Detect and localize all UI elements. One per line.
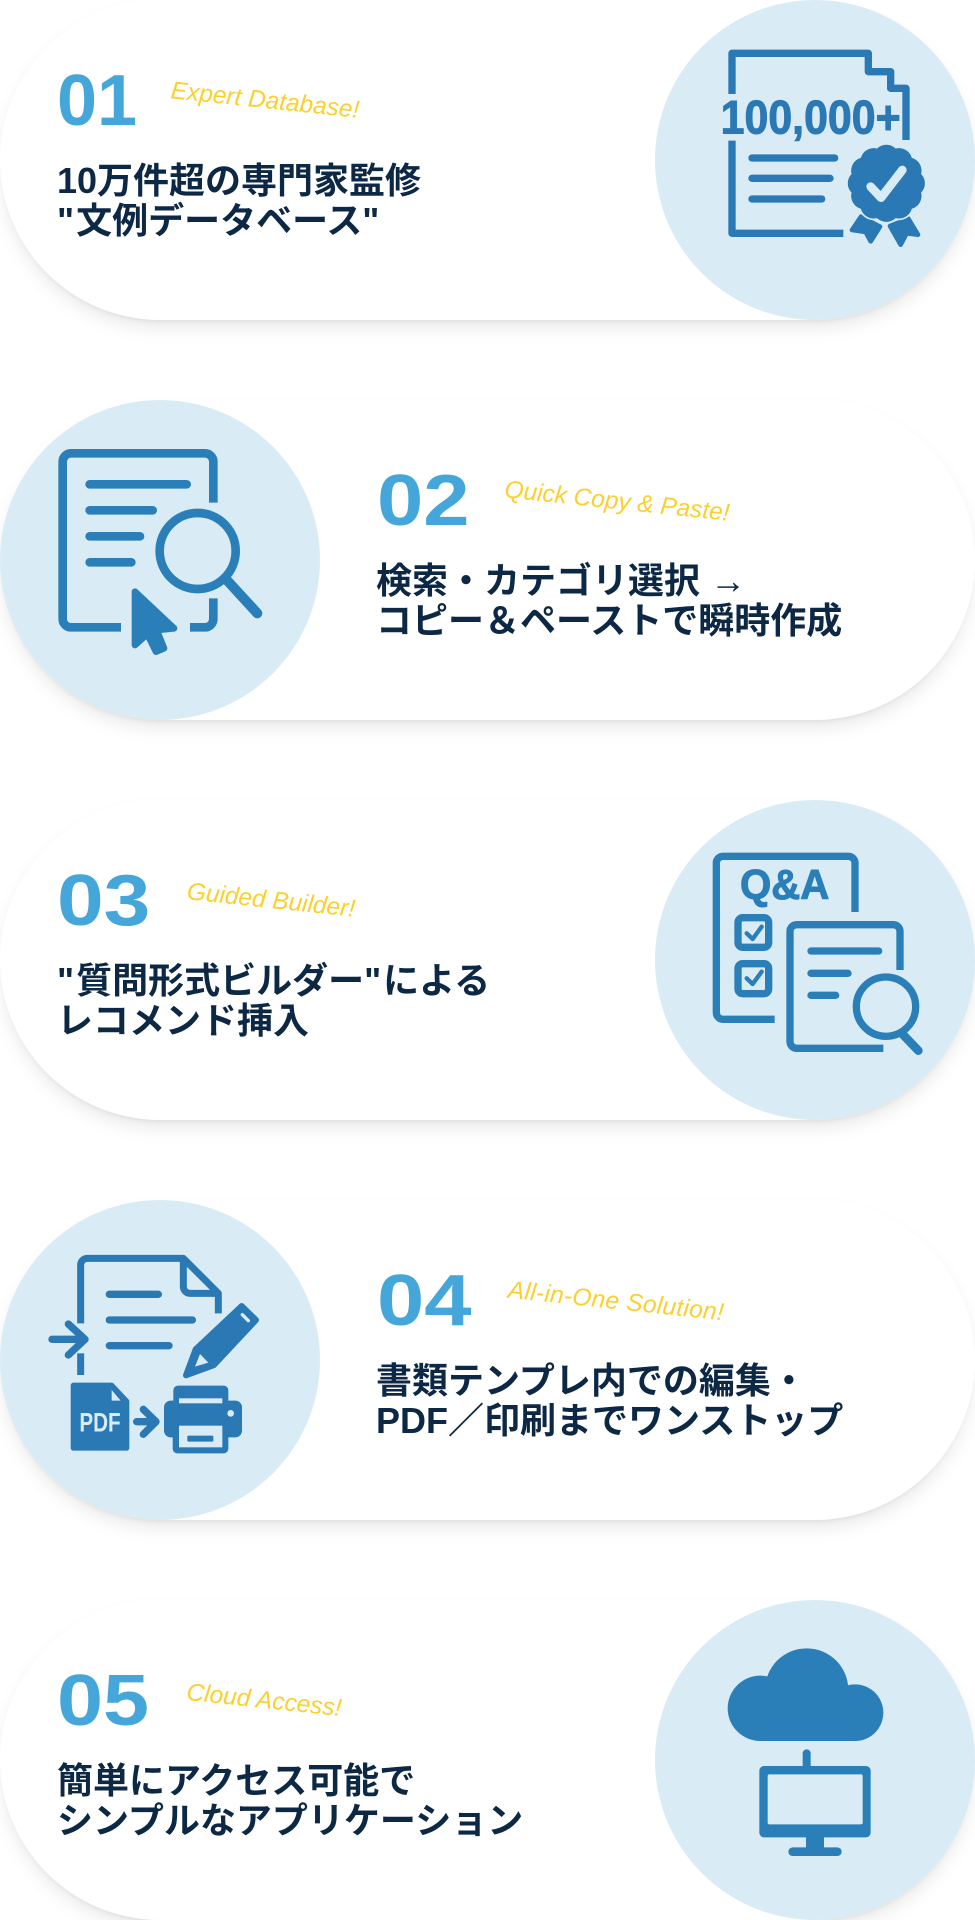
icon circle 04 bbox=[0, 1200, 320, 1520]
icon circle 02 bbox=[0, 400, 320, 720]
panel: feature 02 bbox=[0, 400, 975, 720]
number 03: 03 bbox=[57, 861, 150, 941]
icon: document, magnifier and cursor bbox=[58, 449, 262, 655]
tagline: Guided Builder: Guided Builder! bbox=[186, 878, 356, 923]
tagline: Expert Database: Expert Database! bbox=[170, 77, 361, 124]
icon: cloud and monitor bbox=[728, 1648, 884, 1856]
icon: Q&A checklist and document search: Q&A bbox=[740, 861, 829, 908]
heading 02: 検索・カテゴリ選択 → bbox=[376, 560, 746, 600]
number 04: 04 bbox=[377, 1261, 472, 1341]
heading 03: "質問形式ビルダー"による bbox=[57, 960, 490, 1000]
heading 05 bbox=[57, 1760, 523, 1840]
panel: feature 03 bbox=[0, 800, 975, 1120]
panel: feature 05 bbox=[0, 1600, 975, 1920]
heading 04: 書類テンプレ内での編集・ bbox=[376, 1360, 807, 1400]
heading 05: シンプルなアプリケーション bbox=[57, 1800, 523, 1840]
icon circle 01 bbox=[655, 0, 975, 320]
icon: document, pencil, PDF and printer bbox=[48, 1254, 259, 1454]
heading 02: コピー＆ペーストで瞬時作成 bbox=[376, 600, 842, 640]
panel: feature 04 bbox=[0, 1200, 975, 1520]
heading 04: PDF／印刷までワンストップ bbox=[376, 1400, 843, 1440]
icon: Q&A checklist and document search bbox=[712, 852, 923, 1055]
heading 03: レコメンド挿入 bbox=[57, 1000, 309, 1040]
tagline: Cloud Access: Cloud Access! bbox=[185, 1679, 343, 1722]
heading 03 bbox=[57, 960, 490, 1040]
icon circle 03 bbox=[655, 800, 975, 1120]
number 01: 01 bbox=[57, 61, 137, 141]
tagline: All-in-One Solution: All-in-One Solution! bbox=[507, 1277, 725, 1326]
heading 02 bbox=[376, 560, 842, 640]
icon: document with 100,000+ and certificate badge bbox=[721, 50, 925, 247]
heading 04 bbox=[376, 1360, 843, 1440]
number 05: 05 bbox=[57, 1661, 149, 1741]
icon circle 05 bbox=[655, 1600, 975, 1920]
icon: document, pencil, PDF and printer: PDF bbox=[79, 1408, 121, 1438]
icon: document with 100,000+ and certificate badge: 100,000+ bbox=[721, 91, 901, 144]
panel: feature 01 bbox=[0, 0, 975, 320]
heading 01: 10万件超の専門家監修 bbox=[57, 160, 421, 200]
heading 01: "文例データベース" bbox=[57, 200, 381, 240]
number 02: 02 bbox=[377, 461, 470, 541]
heading 01 bbox=[57, 160, 421, 240]
heading 05: 簡単にアクセス可能で bbox=[57, 1760, 415, 1800]
tagline: Quick Copy & Paste: Quick Copy & Paste! bbox=[503, 476, 731, 527]
